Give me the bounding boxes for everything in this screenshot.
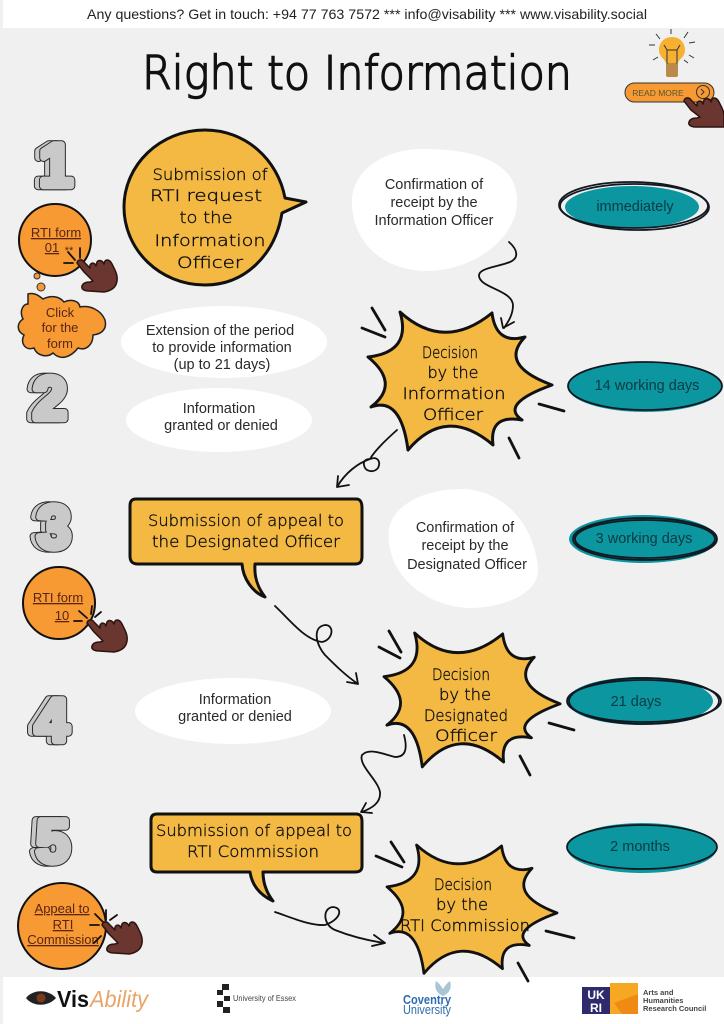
form button: appeal to RTI commission: Appeal to — [35, 901, 89, 916]
blob: confirmation by designated officer: Designated Officer — [407, 557, 527, 573]
icon: pointing hand read more — [684, 98, 724, 127]
logo: Coventry University: University — [403, 1002, 451, 1017]
sparks: decision 3 — [376, 842, 574, 981]
number 3: 3 — [37, 494, 71, 561]
number 1: 1 — [39, 132, 73, 199]
number 4: 4 — [35, 687, 69, 754]
logo: VisAbility — [26, 986, 149, 1012]
speech box: appeal to RTI commission — [151, 814, 362, 901]
number 1: 1 — [34, 132, 68, 199]
pill: 3 working days — [569, 515, 717, 563]
speech box: appeal to RTI commission: Submission of appeal to — [156, 821, 352, 840]
pill: 3 working days: 3 working days — [596, 531, 692, 547]
blob: extension of the period — [121, 306, 327, 378]
form button: RTI form 01: 01 — [45, 240, 59, 255]
speech box: appeal to RTI commission: RTI Commission — [187, 842, 319, 861]
starburst: decision by RTI commission — [387, 845, 557, 973]
number 2: 2 — [28, 365, 62, 432]
starburst: decision by RTI commission: RTI Commission — [400, 916, 530, 935]
speech bubble: submission of RTI request: to the — [180, 208, 232, 227]
starburst: decision by designated officer — [384, 633, 560, 767]
logo: University of Essex: University of Essex — [233, 994, 296, 1003]
starburst: decision by RTI commission: Decision — [434, 875, 492, 894]
logo: UKRI Arts and Humanities Research Council: UK — [587, 988, 605, 1002]
blob: extension of the period: (up to 21 days) — [174, 357, 270, 373]
blob: confirmation by designated officer — [389, 489, 538, 608]
arrow: decision to appeal — [337, 430, 397, 487]
icon: pointing hand appeal — [90, 910, 142, 954]
starburst: decision by RTI commission: by the — [436, 895, 488, 914]
number 5: 5 — [36, 808, 70, 875]
icon: light bulb — [649, 29, 695, 77]
cloud: click for the form: form — [47, 336, 73, 351]
arrow: appeal to decision — [275, 606, 358, 684]
speech bubble: submission of RTI request — [124, 130, 306, 285]
pill: 2 months: 2 months — [610, 839, 670, 855]
number 2: 2 — [28, 365, 62, 432]
form button: appeal to RTI commission: Commission — [27, 932, 99, 947]
speech bubble: submission of RTI request: Information — [154, 231, 266, 250]
cloud: click for the form: Click — [46, 305, 75, 320]
logo: UKRI Arts and Humanities Research Council: Research Council — [643, 1004, 706, 1013]
form button: appeal to RTI commission — [18, 883, 106, 969]
speech bubble: submission of RTI request: Submission of — [152, 165, 268, 184]
starburst: decision by designated officer: Designated — [424, 706, 508, 725]
number 1: 1 — [34, 132, 68, 199]
blob: extension of the period: Extension of the period — [146, 323, 294, 339]
starburst: decision by designated officer: Officer — [435, 726, 497, 745]
logo: Coventry University — [403, 981, 452, 1017]
form button: RTI form 01 — [19, 204, 91, 276]
logo: VisAbility: Vis — [57, 986, 89, 1012]
logo: UKRI Arts and Humanities Research Council — [582, 983, 706, 1015]
contact bar — [3, 0, 724, 28]
blob: information granted or denied: granted or denied — [164, 418, 278, 434]
form button: RTI form 10: 10 — [55, 608, 69, 623]
starburst: decision by information officer: Officer — [423, 405, 483, 424]
logo: University of Essex — [217, 984, 296, 1013]
pill: 14 working days: 14 working days — [595, 378, 699, 394]
starburst: decision by information officer: Decision — [422, 343, 478, 362]
icon: pointing hand form 10 — [74, 606, 127, 652]
blob: information granted or denied — [126, 388, 312, 452]
blob: confirmation by information officer — [352, 149, 517, 271]
blob: information granted or denied 2: granted or denied — [178, 709, 292, 725]
blob: confirmation by designated officer: receipt by the — [421, 538, 509, 554]
speech box: appeal to designated officer: the Designated Officer — [152, 532, 340, 551]
blob: extension of the period: to provide information — [152, 340, 292, 356]
number 3: 3 — [32, 494, 66, 561]
form button: appeal to RTI commission: RTI — [53, 917, 73, 932]
speech box: appeal to designated officer: Submission of appeal to — [148, 511, 344, 530]
number 4: 4 — [35, 687, 69, 754]
logo: Coventry University: Coventry — [403, 992, 452, 1007]
arrow: confirmation to decision — [479, 242, 516, 328]
speech bubble: submission of RTI request: Officer — [177, 253, 244, 272]
starburst: decision by information officer: by the — [428, 363, 478, 382]
pill: 2 months — [567, 823, 717, 873]
logo: UKRI Arts and Humanities Research Council: Arts and — [643, 988, 674, 997]
starburst: decision by information officer: Information — [402, 384, 506, 403]
number 2: 2 — [33, 365, 67, 432]
number 1: 1 — [39, 132, 73, 199]
form button: RTI form 01: ** — [65, 245, 74, 257]
form button: RTI form 10: RTI form — [33, 590, 83, 605]
starburst: decision by information officer — [368, 312, 552, 450]
number 4: 4 — [30, 687, 64, 754]
blob: information granted or denied: Information — [183, 401, 255, 417]
thought dots — [34, 273, 45, 291]
blob: information granted or denied 2 — [135, 678, 331, 744]
arrow: commission appeal to decision — [275, 907, 385, 946]
form button: RTI form 10 — [23, 567, 95, 639]
pill: immediately — [559, 181, 709, 231]
arrow: decision to commission appeal — [361, 735, 406, 813]
pill: 14 working days — [568, 362, 722, 412]
blob: information granted or denied 2: Information — [199, 692, 271, 708]
speech box: appeal to designated officer — [130, 499, 362, 597]
speech bubble: submission of RTI request: RTI request — [150, 186, 262, 205]
number 2: 2 — [33, 365, 67, 432]
blob: confirmation by information officer: receipt by the — [390, 195, 478, 211]
read more button — [625, 83, 714, 102]
pill: immediately: immediately — [596, 199, 674, 215]
number 3: 3 — [37, 494, 71, 561]
number 3: 3 — [32, 494, 66, 561]
sparks: decision 1 — [362, 308, 564, 458]
title: Right to Information — [142, 46, 572, 100]
footer band — [3, 977, 724, 1024]
starburst: decision by designated officer: by the — [439, 685, 491, 704]
sparks: decision 2 — [379, 631, 574, 775]
cloud: click for the form — [18, 294, 106, 357]
form button: RTI form 01: RTI form — [31, 225, 81, 240]
pill: 21 days: 21 days — [611, 694, 661, 710]
logo: UKRI Arts and Humanities Research Council: RI — [590, 1001, 602, 1015]
blob: confirmation by information officer: Confirmation of — [385, 177, 484, 193]
blob: confirmation by designated officer: Confirmation of — [416, 520, 515, 536]
contact bar: Any questions? Get in touch: +94 77 763 7572 *** info@visability *** www.visability.social — [87, 6, 647, 22]
number 5: 5 — [36, 808, 70, 875]
logo: UKRI Arts and Humanities Research Council: Humanities — [643, 996, 683, 1005]
logo: VisAbility: Ability — [88, 986, 149, 1012]
pill: 21 days — [567, 677, 721, 725]
starburst: decision by designated officer: Decision — [432, 665, 490, 684]
number 5: 5 — [31, 808, 65, 875]
read more button: READ MORE — [632, 88, 684, 98]
cloud: click for the form: for the — [42, 320, 78, 335]
number 5: 5 — [31, 808, 65, 875]
icon: pointing hand form 01 — [64, 248, 117, 292]
number 4: 4 — [30, 687, 64, 754]
blob: confirmation by information officer: Information Officer — [374, 213, 494, 229]
